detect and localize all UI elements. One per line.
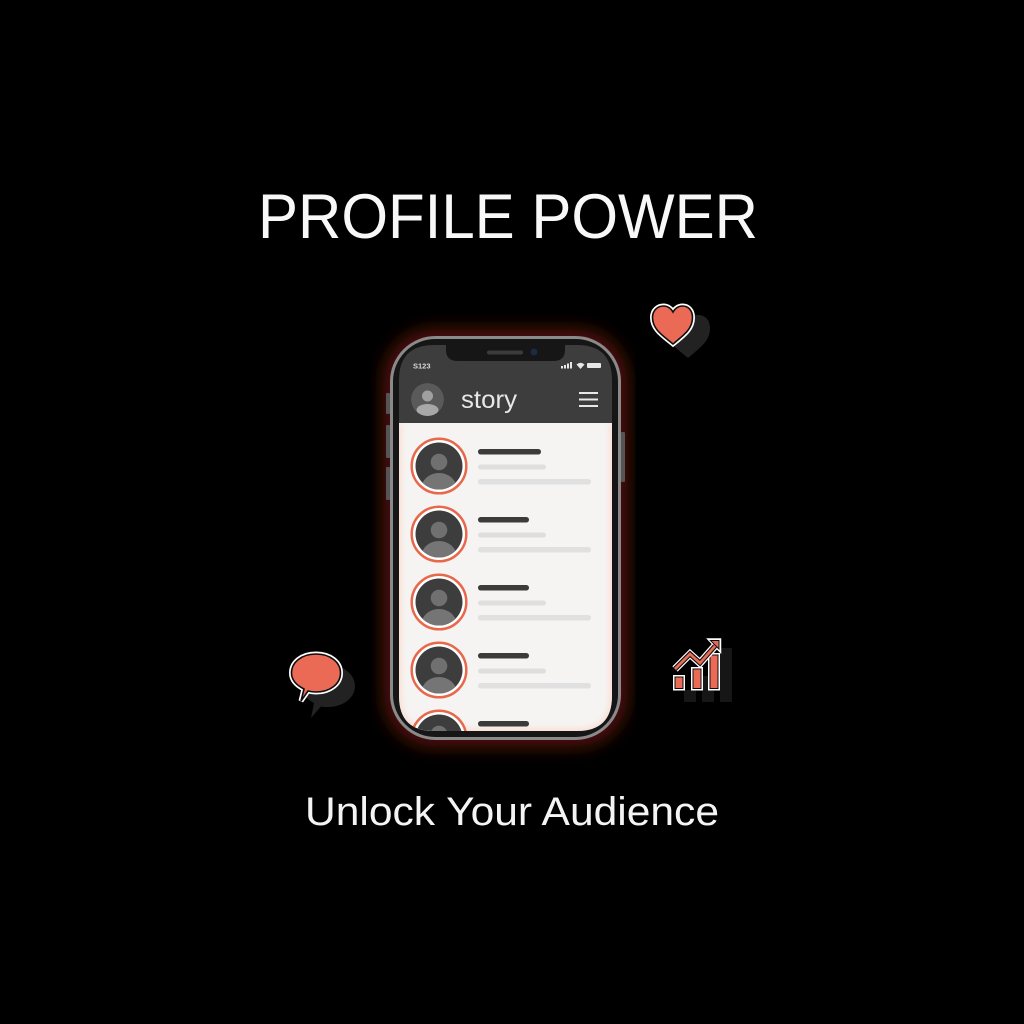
screen list xyxy=(399,423,612,731)
header label: story xyxy=(461,386,518,414)
heart fill xyxy=(652,306,692,344)
notch xyxy=(446,344,565,361)
phone xyxy=(384,330,627,765)
icon: heart xyxy=(652,306,710,358)
heart shadow xyxy=(665,315,710,358)
speaker xyxy=(487,350,523,354)
row 1 xyxy=(410,438,591,494)
heart outline xyxy=(652,306,692,344)
chart shadow xyxy=(684,648,732,702)
hamburger menu xyxy=(579,392,598,407)
phone body xyxy=(392,338,620,738)
icon: growth chart xyxy=(673,640,732,702)
phone red glow xyxy=(384,330,627,746)
bubble outline xyxy=(292,654,340,701)
row 3 xyxy=(410,574,591,630)
side buttons xyxy=(386,393,625,500)
phone header bar xyxy=(399,345,612,423)
row 2 xyxy=(410,506,591,562)
title: PROFILE POWER xyxy=(258,182,758,252)
row 4 xyxy=(410,642,591,698)
camera xyxy=(530,348,538,356)
row 5 clipped xyxy=(413,710,529,731)
status icons xyxy=(561,362,601,369)
trend arrow xyxy=(675,640,720,669)
icon: speech bubble xyxy=(292,654,355,718)
header profile icon xyxy=(411,383,444,416)
bubble fill xyxy=(292,654,340,701)
status time: S123 xyxy=(413,362,431,370)
tagline: Unlock Your Audience xyxy=(305,790,719,834)
bars xyxy=(673,653,720,690)
bubble shadow xyxy=(301,665,355,718)
